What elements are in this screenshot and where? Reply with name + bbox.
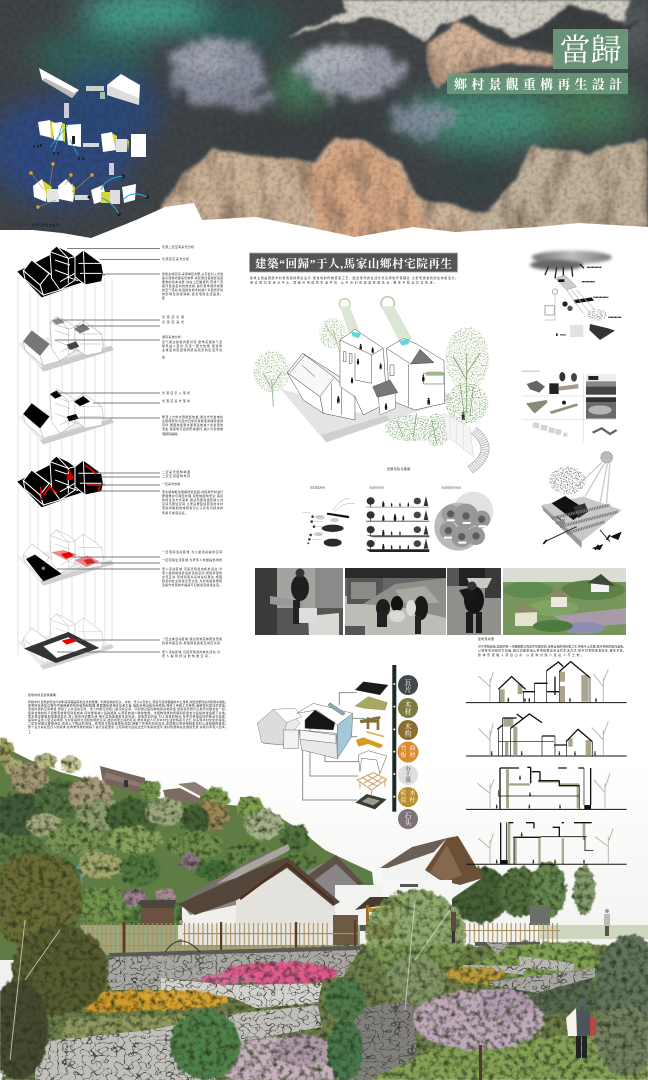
badge: structure: 构 <box>404 729 412 738</box>
diagram: four-row activity strip <box>366 486 429 552</box>
layer notes text: 流失,使建筑与自然形成循环,减少污染排放 <box>162 426 223 431</box>
panel: left axonometric layered analysis <box>17 244 223 670</box>
layer notes text: 屋顶上方的太阳能集热板,通过光伏发电将 <box>162 414 223 419</box>
photo: rendered garden <box>503 568 626 635</box>
badge: bamboo panels: 竹 <box>400 744 407 752</box>
illustration caption: 低碳宅院鸟瞰图 <box>387 466 410 471</box>
diagram: four building sections <box>466 662 627 864</box>
panel: ink landscape banner <box>0 0 648 250</box>
layer notes text: 随风进入室内,带走一部分热量,使建筑 <box>162 343 222 348</box>
layer notes text: 传承与发展演变。 <box>162 510 188 515</box>
trees behind fence right <box>450 862 595 923</box>
badge: wood column: 柱 <box>409 796 416 804</box>
component: green roof deck <box>355 697 387 710</box>
section 1 <box>466 662 627 703</box>
layer 3: black roofs <box>17 389 114 444</box>
layer notes text: 老人提供健康舒适的活动空间,增加邻里的 <box>162 570 222 575</box>
badge: wood column: 混 <box>400 796 407 804</box>
walking figures <box>165 907 610 952</box>
figures <box>337 344 465 420</box>
section 3 <box>466 767 627 810</box>
layer notes text: 老人活动区域,可遥望院落内各处活动,为 <box>162 649 220 654</box>
layer 6: dark ground plate <box>17 614 114 670</box>
panel: hillside landscape rendering <box>0 738 648 1080</box>
layer notes text: 一层宅院活动区域,为儿童活动提供空间 <box>162 549 222 554</box>
subtitle <box>447 73 628 94</box>
heading: 建築回歸于人 <box>250 253 458 272</box>
cream sky <box>289 0 640 60</box>
subtitle: 鄉村景觀重構再生設計 <box>454 77 622 92</box>
green foreground trees <box>0 852 648 1080</box>
small wooden shed <box>140 900 176 928</box>
text: lower left design description: 整个设计旨在回归人的需求,在尊重传统的前提下进行适度更新,让宅院成为连接过去与未来的纽带,使村民能够在此继续安居,并吸引年轻人回乡。 <box>28 724 228 729</box>
layer notes text: 院落中庭空间,增强围合感和空间层次感 <box>162 640 220 645</box>
intro text: 通过回归生活与乡土,营造可持续的生活环境,让乡亲们在这里安居乐业,留住乡愁记忆与情感。 <box>250 280 437 284</box>
layer notes text: 光源层引用 <box>162 314 184 319</box>
component: black roof <box>355 682 388 695</box>
text: lower left design description: 建筑材料及建筑策略: <box>28 692 57 697</box>
text: renewal caption <box>478 636 626 657</box>
badge: tile <box>398 675 418 695</box>
massing: row 1 <box>39 68 140 105</box>
badge: earth wall: 土 <box>405 770 411 778</box>
leader lines <box>55 248 160 652</box>
hill base <box>0 745 376 960</box>
component: white walls <box>358 751 387 773</box>
stone retaining walls <box>35 942 595 1080</box>
diagram: exploded construction components <box>257 665 396 812</box>
road <box>108 946 360 958</box>
second house <box>387 338 445 410</box>
badge: bamboo panels <box>398 742 418 762</box>
diagram: overlapping activity circles: 活动范围分析示意 <box>441 486 461 490</box>
layer notes text: 新的生活方式需求,通过局部改造形成公共 <box>162 497 223 502</box>
component: floor plate <box>355 794 387 809</box>
layer notes text: 同时,屋面收集雨水灌溉菜地减少水资源的 <box>162 422 223 427</box>
layer notes text: 主体室内温度保持舒适稳定的生活环境 <box>162 347 222 352</box>
layer notes text: 宅院风貌和地域特色可让子孙有可持续的 <box>162 505 223 510</box>
text: lower left design description: 传统乡村,建筑的形态与材料来源都是有机生长的结果。利用当地的石头、木材、竹子以及夯土,营造与自然相融的乡土建筑,并结合屋顶采光和雨水收集。 <box>28 699 228 704</box>
layer notes text: 一层采光外墙 <box>162 481 180 486</box>
badge: bamboo panels: 板 <box>400 751 407 759</box>
text: renewal caption: 以现有空间格局为基础,通过功能重组让老宅院更适合当代生活方式,使乡村宅院焕发新生,留住乡愁。 <box>478 648 626 652</box>
layer 4: red structure <box>17 456 105 507</box>
layer notes text: 光源层采光 <box>162 319 184 324</box>
layer notes text: 境。 <box>162 354 166 359</box>
left wing <box>257 708 302 745</box>
photo: man carrying load <box>447 568 501 635</box>
badge: bamboo panels: 面 <box>409 744 416 752</box>
layer notes text: 形。 <box>162 295 166 300</box>
badge: stone: 头 <box>404 818 412 827</box>
badge: earth wall <box>398 765 418 785</box>
torn paper edge <box>0 203 648 250</box>
material badges <box>398 675 418 829</box>
massing caption: 建筑空間形态推演 <box>32 222 59 227</box>
text: lower left design description: 雨水通过屋面和地面收集后,流入院落内的蓄水池,用于菜地灌溉和日常清洁。建筑南向开窗,引入充足的阳光,冬季可获得良好的被动式采暖。 <box>28 713 228 718</box>
material collage <box>522 371 617 442</box>
layer notes text: 太阳能转化为室内日常可用能源并储存使用 <box>162 418 223 423</box>
layer notes text: 二层空间结构布局 <box>162 473 190 478</box>
rock cliffs <box>150 137 648 240</box>
text: lower left design description: 二层空间通过楼梯连接,形成上下联动的流线。老宅的木构架被重新加固,保留了原有的历史信息,新增部分则使用轻质材料以减轻结构荷载。 <box>28 721 228 726</box>
flower beds <box>70 962 505 1012</box>
bamboo <box>385 383 488 447</box>
layer notes text: 光源层层采光分析 <box>162 256 189 261</box>
layer notes text: 提高建筑内部采光效率,满足居住使用舒适度 <box>162 275 223 280</box>
fence yard ground <box>80 925 360 955</box>
text: lower left design description: 了。 <box>28 729 32 734</box>
layer notes text <box>162 244 223 658</box>
material column bar <box>392 665 396 812</box>
paper grain <box>0 0 648 238</box>
tree left <box>253 351 290 407</box>
layer notes text: 空气通过建筑内部对流,夏季凉爽的气流 <box>162 339 222 344</box>
layer notes text: 光源层引入现状 <box>162 390 190 395</box>
text: lower left design description: 庭院中设置小型活动场所,为村民提供交流和休闲的空间,鼓励邻里之间的互动,重新唤起人们对乡村生活的情感与记忆,并实现乡村文化的延续。 <box>28 717 228 722</box>
tree back <box>319 318 346 353</box>
heading: 建築回歸于人: 建築“回歸”于人,馬家山鄉村宅院再生 <box>255 256 452 270</box>
badge: tile: 片 <box>404 685 412 694</box>
layer notes text: 老木结构框架保留修复加固,并使用竹材进行 <box>162 489 223 494</box>
orange peak <box>430 20 554 87</box>
massing: row 3 with sun points <box>29 162 149 216</box>
layer notes text: 一层主体活动区域,通过建筑实体围合形成 <box>162 636 222 641</box>
diagram: overlapping activity circles <box>434 486 493 551</box>
layer notes text: 宅院环境美化。 <box>162 431 180 436</box>
badge: structure: 木 <box>404 722 412 731</box>
component: timber frame <box>357 773 387 795</box>
badge: earth wall: 墙 <box>405 776 411 784</box>
section 2 <box>466 714 627 756</box>
text: lower left design description: 老宅院在修复过程中尽量保留原有的结构和肌理,屋面更新使用青瓦和木板,墙体采用当地石料砌筑,保持了传统工艺特色,兼顾现代居住的舒适。 <box>28 703 228 708</box>
component: golden beams <box>356 731 384 748</box>
tree right <box>446 327 489 413</box>
layer notes text: 一层宅院生活区域,为老年人休憩提供场所 <box>162 557 222 562</box>
entrance pavilion <box>373 380 398 415</box>
photo: villagers moving stones <box>345 568 446 635</box>
text: renewal caption: 对于宅院改造,建筑的每一处细部都与周边环境相协调,采用当地的材料和工艺,传承乡土文脉,提升宅院的居住品质。 <box>478 644 626 648</box>
badge: stone: 石 <box>404 812 412 820</box>
badge: timber: 材 <box>404 707 412 716</box>
layer notes text: 循环促进室内的热交换,提升夏季通风效果 <box>162 283 223 288</box>
diagram: massing evolution on the banner <box>29 68 149 227</box>
rain cycle diagram <box>530 251 622 340</box>
layer 1: roof and structure in black <box>17 246 105 297</box>
badge: structure <box>398 720 418 740</box>
photo: man sawing wood <box>255 568 343 635</box>
diagram: rainwater strategy <box>303 486 355 547</box>
intro text <box>250 275 458 284</box>
text: lower left design description: 宅院内部的空间重组,增加了公共活动空间、老人休憩空间和儿童活动空间。同时通过庭院种植和菜地营造,使院落景观与山地环境融合在一起。 <box>28 706 228 711</box>
layer notes text: 光源二层空间采光分析 <box>162 244 194 249</box>
illustration: axonometric courtyard house <box>253 297 489 470</box>
layer notes text: 老人提供舒适的休憩空间。 <box>162 653 212 658</box>
layer 5: red courtyard areas <box>17 530 114 586</box>
title: 當歸: 當歸 <box>560 33 622 68</box>
component: wooden truss <box>360 716 381 730</box>
badge: wood column: 砖 <box>400 789 407 797</box>
layer notes text: 屋面维护与保温处理,使整体结构安全,满足 <box>162 493 223 498</box>
sun tube 2 <box>381 297 412 344</box>
white village buildings <box>304 836 483 935</box>
badge: wood column <box>398 787 418 807</box>
badge: timber: 木 <box>404 700 412 709</box>
ground slab <box>280 388 453 442</box>
badge: timber <box>398 698 418 718</box>
layer notes text: 要求的基本功能,并在上层做通风,形成气流 <box>162 279 223 284</box>
text: lower left design description <box>28 692 228 734</box>
section 4 <box>466 823 627 864</box>
text: renewal caption: 建筑现状图 <box>478 636 494 641</box>
distant hillside buildings <box>100 766 254 815</box>
layer 2: grey roofs <box>17 317 114 372</box>
solar and wind diagram <box>542 452 622 550</box>
badge: bamboo panels: 材 <box>409 751 416 759</box>
connector lines <box>303 693 365 800</box>
layer notes text: 光源层采光现状 <box>162 398 190 403</box>
layer notes text: 老人活动区域,可遥望院落内各处活动,为 <box>162 566 222 571</box>
terraced ground <box>0 942 648 1080</box>
pavilion gate <box>355 897 412 939</box>
projection guide lines <box>18 278 112 655</box>
mist clouds <box>165 40 457 135</box>
badge: stone <box>398 809 418 829</box>
layer notes text: 交流互动,形成邻里关系的良好再生,增强 <box>162 574 222 579</box>
intro text: 建筑主题是围绕乡村老宅院的再生设计,把当地的传统营造工艺、结合现代的生活方式及绿色环保理念,让老宅焕发新的生命和活力。 <box>250 275 458 280</box>
terrace stair <box>443 413 485 470</box>
badge: earth wall: 夯 <box>405 765 411 773</box>
layer notes text: 的空气流动,并选用当地木材减少对自然环境 <box>162 287 223 292</box>
layer notes text: 通风系统分析: <box>162 334 182 339</box>
text: lower left design description: 使用当地材料不但能有效降低建造成本,同时能够减少运输能耗,从而有效减少碳排放量。木结构建筑的拆解和复用也为后续的改造留下余地。 <box>28 710 228 715</box>
panel: right column diagrams <box>522 251 622 550</box>
text: renewal caption: 整体景观融入周边山水,以建筑为媒介连接人与土地。 <box>478 652 584 657</box>
layer notes text: 建筑主体空间,采用单层木屋,从天窗引入光线 <box>162 271 223 276</box>
forest canopy <box>0 738 318 936</box>
main barn <box>178 844 340 945</box>
layer notes text: 院落的社交属性及安全性,为村民提供便利 <box>162 578 222 583</box>
tower house <box>340 329 387 415</box>
layer notes text: 及提升村民的幸福感与归属感及健康生活。 <box>162 582 222 587</box>
wooden fence <box>80 915 560 954</box>
layer notes text: 二层采光结构墙面 <box>162 469 190 474</box>
badge: tile: 瓦 <box>404 679 412 687</box>
layer notes text: 空间与居住空间,让老房屋延续原有的乡村 <box>162 501 223 506</box>
sun tube 1 <box>339 299 361 337</box>
right wing with section <box>283 703 353 759</box>
diagram: four-row activity strip: 活动空间分析 <box>369 486 384 490</box>
massing: row 2 <box>34 103 146 160</box>
elderly villager in foreground <box>566 999 596 1058</box>
diagram: rainwater strategy: 雨水收集利用 <box>310 486 325 490</box>
barn <box>287 353 368 420</box>
badge: wood column: 木 <box>409 789 416 797</box>
layer notes text: 的影响及资源消耗,改善宅院生活品质。 <box>162 291 223 296</box>
blossom trees <box>215 989 544 1080</box>
